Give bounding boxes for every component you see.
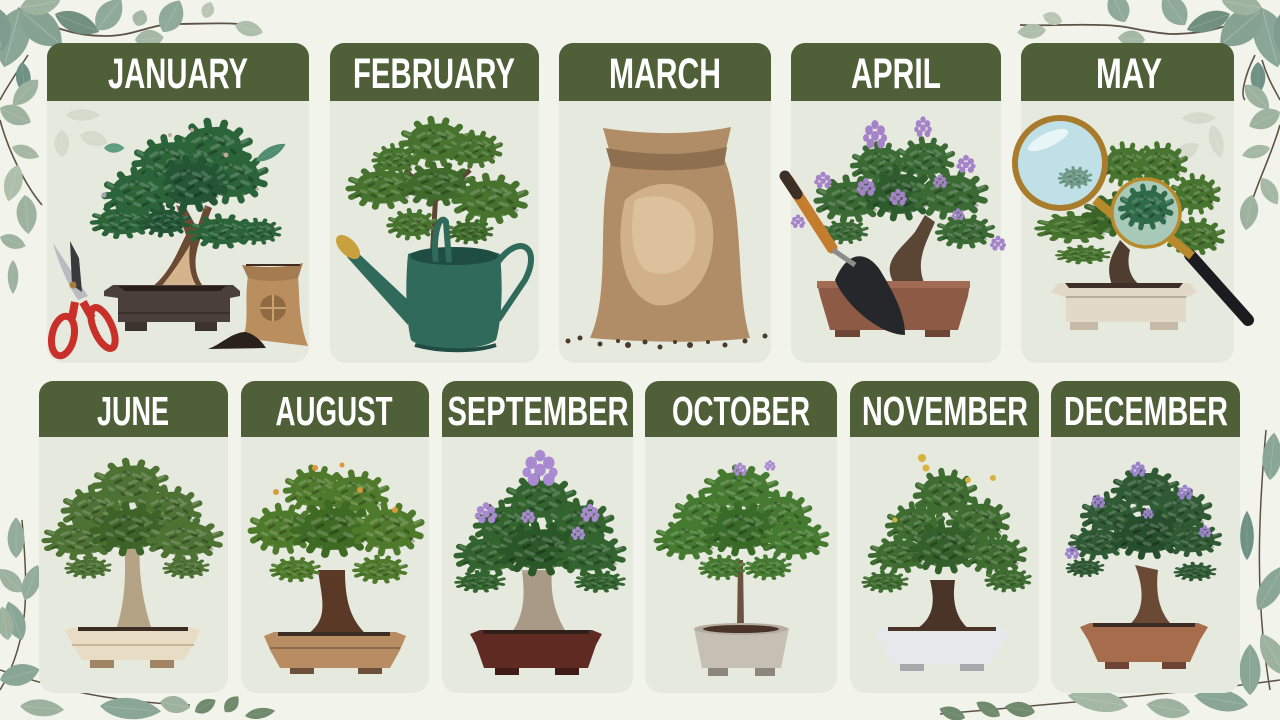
bonsai tree xyxy=(45,461,220,630)
heading: December xyxy=(1051,381,1240,437)
heading: August xyxy=(241,381,429,437)
bonsai tree xyxy=(1038,144,1222,285)
flowering tree xyxy=(457,450,623,635)
bonsai pot xyxy=(104,285,240,331)
young tree xyxy=(657,460,826,628)
heading: February: FEBRUARY xyxy=(353,50,515,98)
bonsai pot xyxy=(65,627,200,668)
bonsai tree xyxy=(93,122,279,290)
panel: September xyxy=(442,381,633,693)
icon: burlap sack xyxy=(590,127,750,342)
bonsai tree xyxy=(251,462,421,636)
heading: May xyxy=(1021,43,1234,101)
card watermark leaves xyxy=(1171,112,1227,164)
soil scatter xyxy=(566,334,768,350)
corner foliage: bottom left xyxy=(0,517,276,720)
bonsai pot xyxy=(1080,623,1208,669)
heading: September xyxy=(442,381,633,437)
bonsai pot xyxy=(817,281,970,337)
bonsai pot xyxy=(1051,283,1197,330)
panel: December xyxy=(1051,381,1240,693)
icon: soil sack xyxy=(208,263,308,349)
heading: January: JANUARY xyxy=(108,50,248,98)
bonsai tree xyxy=(864,454,1029,630)
corner foliage: top left xyxy=(0,0,265,294)
bonsai pot xyxy=(875,627,1008,671)
icon: magnifying glasses xyxy=(1015,118,1248,320)
panel: February xyxy=(330,43,539,363)
bonsai pot xyxy=(264,632,406,674)
heading: October: OCTOBER xyxy=(672,388,810,434)
panel: March xyxy=(559,43,771,363)
heading: August: AUGUST xyxy=(276,388,392,434)
flowering tree xyxy=(791,116,1006,285)
bonsai pot xyxy=(470,630,602,675)
icon: watering can xyxy=(332,220,531,350)
corner foliage: bottom right xyxy=(937,430,1280,720)
heading: September: SEPTEMBER xyxy=(448,388,628,434)
heading: February xyxy=(330,43,539,101)
heading: April xyxy=(791,43,1001,101)
heading: November xyxy=(850,381,1039,437)
heading: October xyxy=(645,381,837,437)
panel: April xyxy=(785,43,1006,363)
icon: garden trowel xyxy=(785,176,905,335)
card watermark leaves xyxy=(55,109,110,157)
panel: January xyxy=(47,43,309,363)
heading: January xyxy=(47,43,309,101)
icon: pruning shears xyxy=(48,241,120,358)
heading: November: NOVEMBER xyxy=(862,388,1028,434)
panel: May xyxy=(1015,43,1248,363)
heading: April: APRIL xyxy=(851,50,941,98)
heading: June: JUNE xyxy=(97,388,169,434)
heading: June xyxy=(39,381,228,437)
heading: May: MAY xyxy=(1096,50,1162,98)
flowering tree xyxy=(1065,462,1219,628)
panel: August xyxy=(241,381,429,693)
panel: October xyxy=(645,381,837,693)
panel: November xyxy=(850,381,1039,693)
round pot xyxy=(694,623,789,676)
panel: June xyxy=(39,381,228,693)
corner foliage: top right xyxy=(1017,0,1280,232)
heading: March xyxy=(559,43,771,101)
icon: falling leaves xyxy=(104,139,288,166)
tree in watering can xyxy=(349,119,525,260)
heading: March: MARCH xyxy=(609,50,721,98)
